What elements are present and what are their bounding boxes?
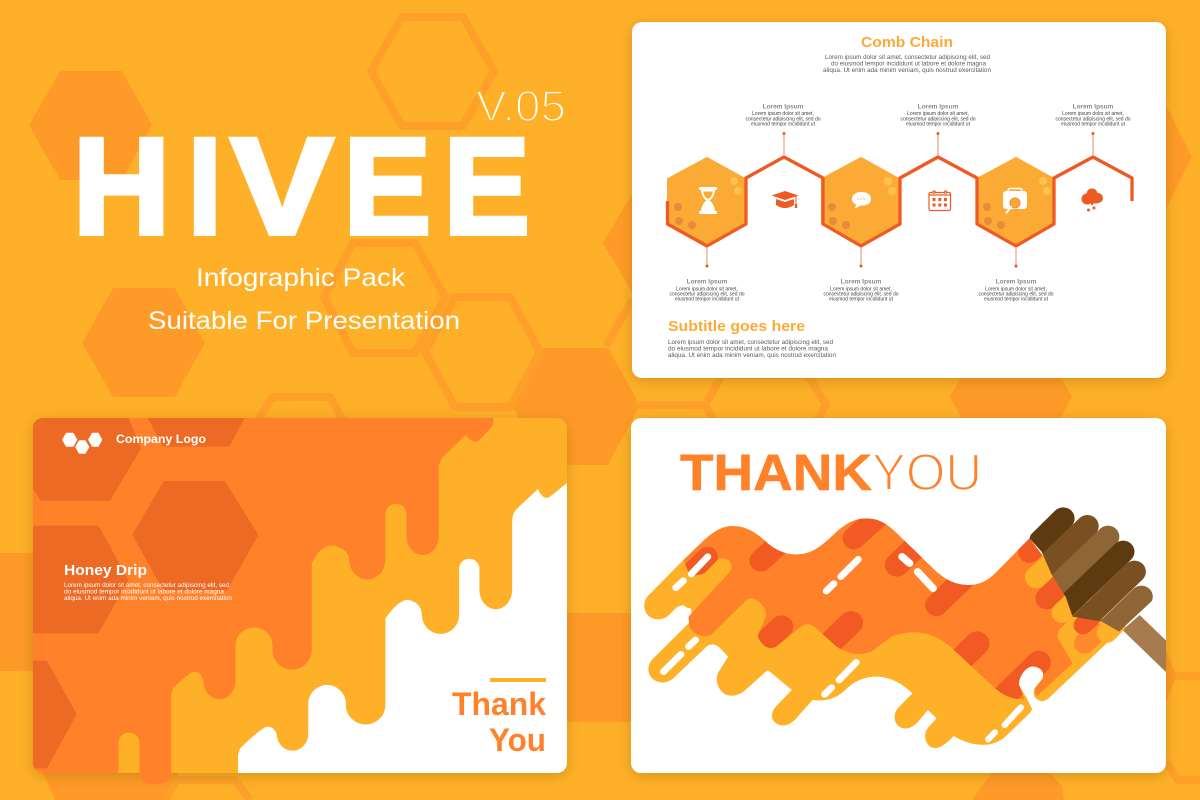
dark hexagons <box>30 415 256 766</box>
icon: graduation cap <box>772 191 798 208</box>
icon: camera with magnifier <box>1003 188 1027 212</box>
top labels: eiusmod tempor incididunt ut <box>906 122 971 128</box>
card shadow <box>33 418 567 773</box>
white dashes <box>663 557 1021 739</box>
top labels: eiusmod tempor incididunt ut <box>751 122 816 128</box>
heading: YOU: YOU <box>872 444 982 502</box>
version label: V.05 <box>476 82 566 131</box>
honey drip text <box>64 583 232 602</box>
bottom labels <box>669 278 1054 302</box>
honey drip text: Lorem ipsum dolor sit amet, consectetur adipiscing elit, sed <box>64 583 229 589</box>
top labels: Lorem ipsum dolor sit amet, <box>752 111 814 117</box>
bottom labels: Lorem ipsum dolor sit amet, <box>676 286 738 292</box>
subtitle line 1: Infographic Pack <box>196 264 406 292</box>
thank you text: You <box>489 722 546 758</box>
icon: hourglass <box>699 187 717 214</box>
thank you text: Thank <box>452 686 546 722</box>
honey stick illustration <box>644 513 1171 748</box>
company logo text: Company Logo <box>116 432 206 446</box>
title: HIVEE: V <box>231 110 333 264</box>
subtitle text: aliqua. Ut enim ada minim veniam, quis nostrud exercitation <box>668 353 836 359</box>
white layer <box>238 480 571 778</box>
yellow honey <box>644 538 1119 748</box>
panel: comb chain <box>632 22 1166 378</box>
drip overflow <box>140 760 171 784</box>
top labels: Lorem Ipsum <box>1073 104 1114 110</box>
top labels: Lorem Ipsum <box>763 104 804 110</box>
panel: thank you <box>631 418 1171 773</box>
chain outline <box>668 157 1132 246</box>
top labels <box>745 104 1131 128</box>
bottom labels: eiusmod tempor incididunt ut <box>675 296 740 302</box>
subtitle text: Lorem ipsum dolor sit amet, consectetur adipiscing elit, sed <box>668 340 833 346</box>
top labels: consectetur adipiscing elit, sed do <box>745 116 821 122</box>
intro text: do eiusmod tempor incididunt ut labore et dolore magna <box>831 62 987 68</box>
subtitle text <box>668 340 836 359</box>
brush fingers <box>1026 518 1141 635</box>
icon: calendar <box>929 191 950 210</box>
white notch <box>1019 667 1043 709</box>
yellow pills <box>690 563 1116 643</box>
title: HIVEE: I <box>188 110 222 264</box>
subtitle text: do eiusmod tempor incididunt ut labore et dolore magna <box>668 346 829 352</box>
bottom labels: eiusmod tempor incididunt ut <box>829 296 894 302</box>
heading: THANK: THANK <box>680 444 872 501</box>
filled hexagons <box>668 158 1054 244</box>
top labels: consectetur adipiscing elit, sed do <box>1055 116 1131 122</box>
accent bar <box>490 678 546 682</box>
company logo mark <box>63 434 102 453</box>
bottom labels: Lorem Ipsum <box>996 278 1037 286</box>
icon: storm cloud <box>1082 188 1103 212</box>
title: HIVEE: E <box>444 110 530 264</box>
title: HIVEE: E <box>344 110 431 264</box>
intro text <box>823 55 991 74</box>
orange honey <box>683 518 1074 699</box>
bottom labels: Lorem Ipsum <box>841 278 882 286</box>
honey drip text: aliqua. Ut enim ada minim veniam, quis nostrud exercitation <box>64 596 232 602</box>
intro text: Lorem ipsum dolor sit amet, consectetur adipiscing elit, sed <box>825 55 990 61</box>
bottom labels: Lorem ipsum dolor sit amet, <box>985 286 1047 292</box>
panel: honey drip <box>30 415 571 784</box>
bottom labels: Lorem ipsum dolor sit amet, <box>830 286 892 292</box>
title: HIVEE: H <box>73 110 170 264</box>
bottom labels: consectetur adipiscing elit, sed do <box>978 292 1054 298</box>
orange layer <box>30 415 493 778</box>
top labels: consectetur adipiscing elit, sed do <box>900 116 976 122</box>
bottom labels: eiusmod tempor incididunt ut <box>984 296 1049 302</box>
bottom labels: consectetur adipiscing elit, sed do <box>823 292 899 298</box>
bottom labels: consectetur adipiscing elit, sed do <box>669 292 745 298</box>
bottom labels: Lorem Ipsum <box>687 278 728 286</box>
top labels: Lorem ipsum dolor sit amet, <box>1062 111 1124 117</box>
honeycomb dots <box>674 177 1051 229</box>
top labels: Lorem Ipsum <box>918 104 959 110</box>
yellow layer <box>30 415 570 775</box>
icon: speech bubble <box>852 192 871 208</box>
intro text: aliqua. Ut enim ada minim veniam, quis nostrud exercitation <box>823 68 991 74</box>
thank you text <box>452 686 546 758</box>
card background <box>632 22 1166 378</box>
heading: Honey Drip: Honey Drip <box>64 562 147 579</box>
top labels: eiusmod tempor incididunt ut <box>1061 122 1126 128</box>
honey drip text: do eiusmod tempor incididunt ut labore et dolore magna <box>64 590 225 596</box>
subtitle: Subtitle goes here <box>668 318 805 335</box>
stick handle <box>1123 615 1166 672</box>
connectors <box>706 132 1094 268</box>
heading: Comb Chain: Comb Chain <box>861 35 953 51</box>
subtitle line 2: Suitable For Presentation <box>148 307 460 335</box>
top labels: Lorem ipsum dolor sit amet, <box>907 111 969 117</box>
red streaks <box>694 513 1047 698</box>
card background <box>631 418 1166 773</box>
